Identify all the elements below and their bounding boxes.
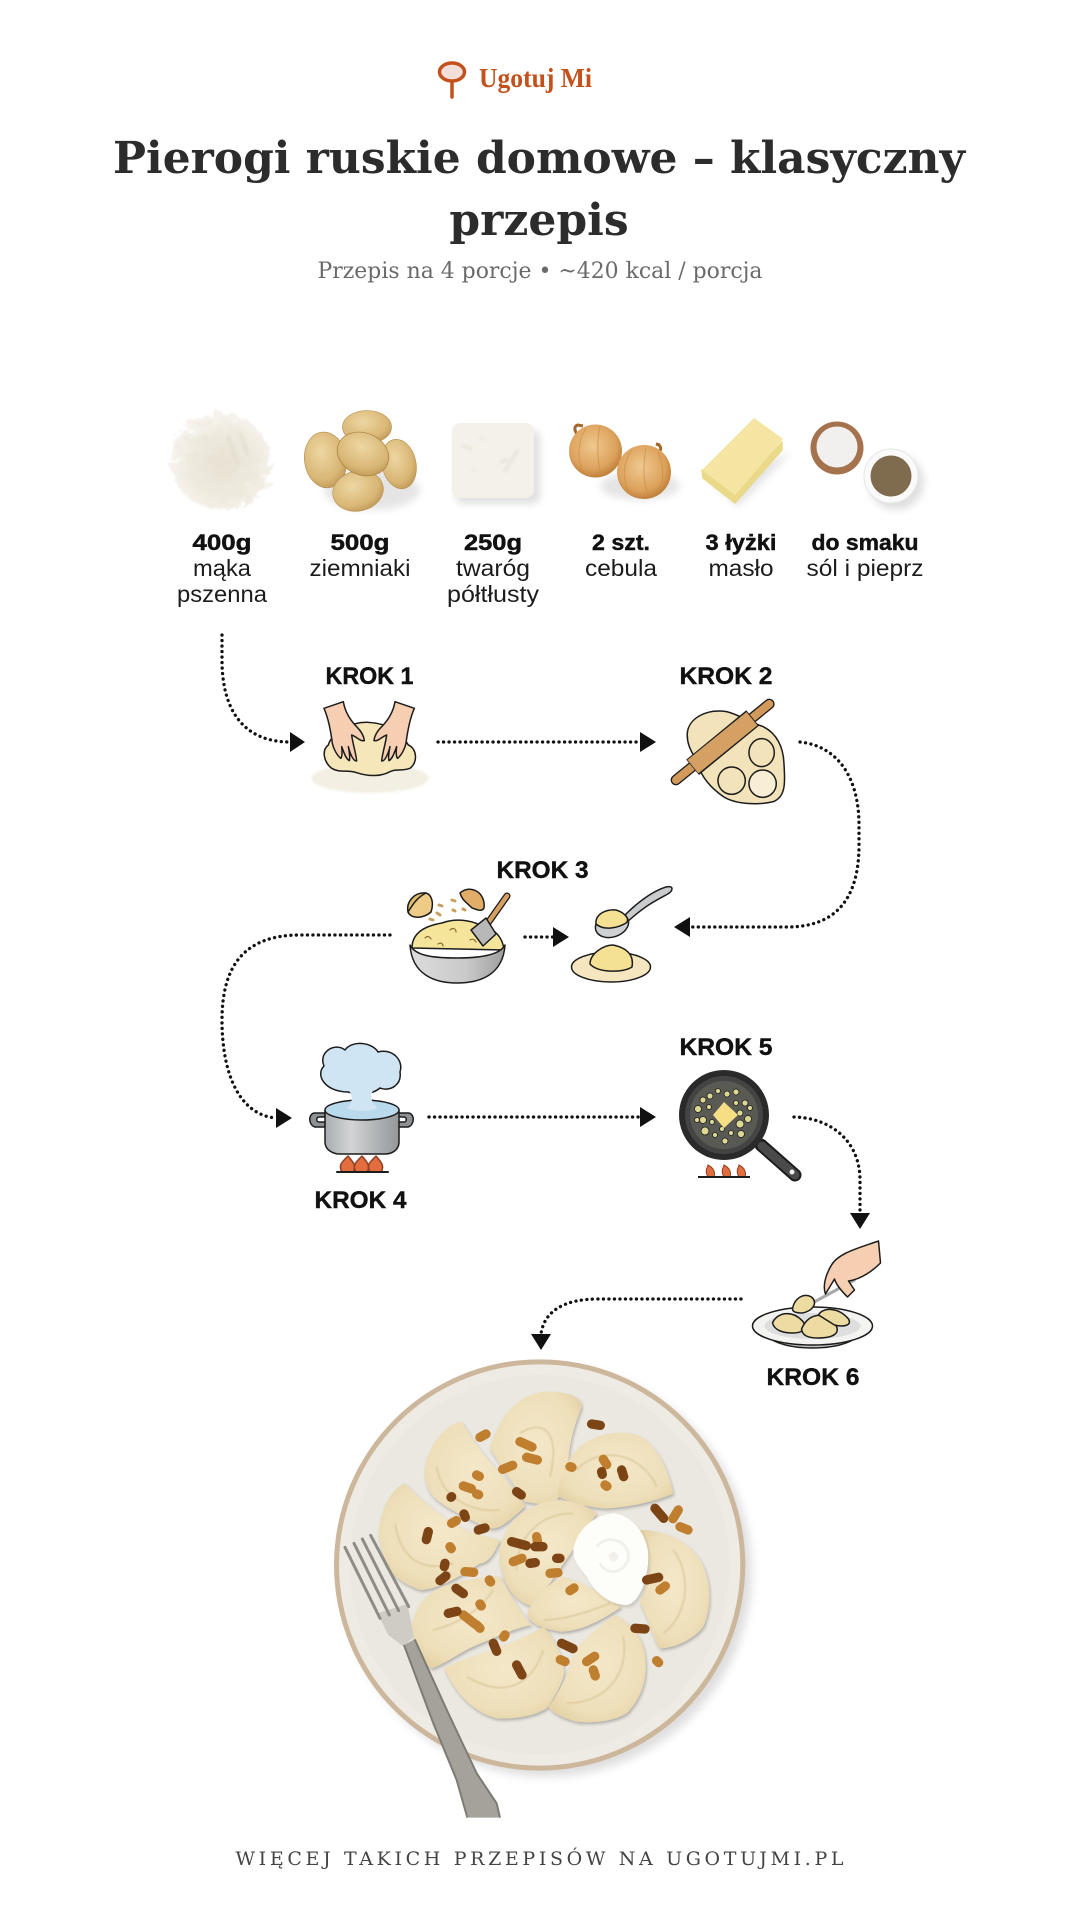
plate xyxy=(334,1359,752,1777)
arrow: step 1 to step 2 xyxy=(438,732,656,752)
final dish: plate of pierogi xyxy=(334,1359,752,1818)
label: step 2: KROK 2 xyxy=(680,663,772,690)
ingredient: salt and pepper: do smaku xyxy=(812,530,918,555)
ingredient: flour: mąka xyxy=(193,555,251,581)
ingredient: white cheese: półtłusty xyxy=(447,581,540,607)
title: Pierogi ruskie domowe – klasyczny xyxy=(113,133,966,184)
panel: ingredients xyxy=(171,410,924,607)
ingredient: white cheese: 250g xyxy=(464,530,522,555)
ingredient: onions: cebula xyxy=(585,555,657,581)
step 2 xyxy=(676,663,785,804)
ingredient: butter xyxy=(702,419,792,581)
logo wordmark: Ugotuj Mi xyxy=(479,63,592,93)
pierogi xyxy=(379,1392,709,1722)
fried onions xyxy=(426,1424,688,1676)
step 4 xyxy=(310,1043,413,1214)
icon: hands kneading dough xyxy=(311,702,429,793)
arrow: small dotted xyxy=(525,927,569,947)
footer: WIĘCEJ TAKICH PRZEPISÓW NA UGOTUJMI.PL xyxy=(236,1847,844,1870)
title xyxy=(113,133,966,246)
label: step 6: KROK 6 xyxy=(766,1364,860,1391)
label: step 3: KROK 3 xyxy=(496,857,588,884)
subtitle: Przepis na 4 porcje • ~420 kcal / porcja xyxy=(318,259,762,284)
ingredient: white cheese xyxy=(447,423,540,607)
ingredient: potatoes xyxy=(301,410,421,581)
icon: logo spoon xyxy=(440,63,464,97)
title: przepis xyxy=(449,195,629,246)
logo xyxy=(440,63,592,97)
icon: hand serving pierogi xyxy=(752,1241,880,1348)
icon: rolling pin and dough circles xyxy=(676,704,785,804)
ingredient: onions xyxy=(569,424,680,581)
label: step 1: KROK 1 xyxy=(326,663,414,690)
icon: bowl with potato filling xyxy=(408,889,507,983)
ingredient: onions: 2 szt. xyxy=(592,530,650,555)
ingredient: white cheese: twaróg xyxy=(456,555,530,581)
ingredient: flour: 400g xyxy=(192,530,252,555)
step 5 xyxy=(679,1034,795,1177)
step 1 xyxy=(311,663,429,793)
ingredient: salt and pepper xyxy=(806,422,924,581)
label: step 5: KROK 5 xyxy=(680,1034,772,1061)
step 3 xyxy=(408,857,672,983)
arrow: step 6 to final dish xyxy=(531,1299,741,1350)
arrow: step 5 to step 6 xyxy=(794,1117,870,1229)
ingredient: flour xyxy=(171,414,271,607)
arrow: ingredients to step 1 xyxy=(222,635,305,752)
sour cream xyxy=(573,1513,650,1608)
ingredient: flour: pszenna xyxy=(177,581,267,607)
ingredient: butter: masło xyxy=(708,555,774,581)
fork xyxy=(345,1535,500,1818)
ingredient: potatoes: ziemniaki xyxy=(310,555,410,581)
ingredient: butter: 3 łyżki xyxy=(706,530,776,555)
step 6 xyxy=(752,1241,880,1391)
arrow: step 3 to step 4 xyxy=(222,935,390,1128)
pierogi folds xyxy=(395,1427,685,1703)
icon: spoon and dough circle with filling xyxy=(572,887,672,982)
label: step 4: KROK 4 xyxy=(314,1187,407,1214)
icon: boiling pot xyxy=(310,1043,413,1172)
arrow: step 2 to step 3 xyxy=(674,742,859,937)
icon: frying pan with butter xyxy=(679,1070,795,1177)
ingredient: salt and pepper: sól i pieprz xyxy=(806,555,924,581)
arrow: step 4 to step 5 xyxy=(429,1107,656,1127)
ingredient: potatoes: 500g xyxy=(330,530,390,555)
